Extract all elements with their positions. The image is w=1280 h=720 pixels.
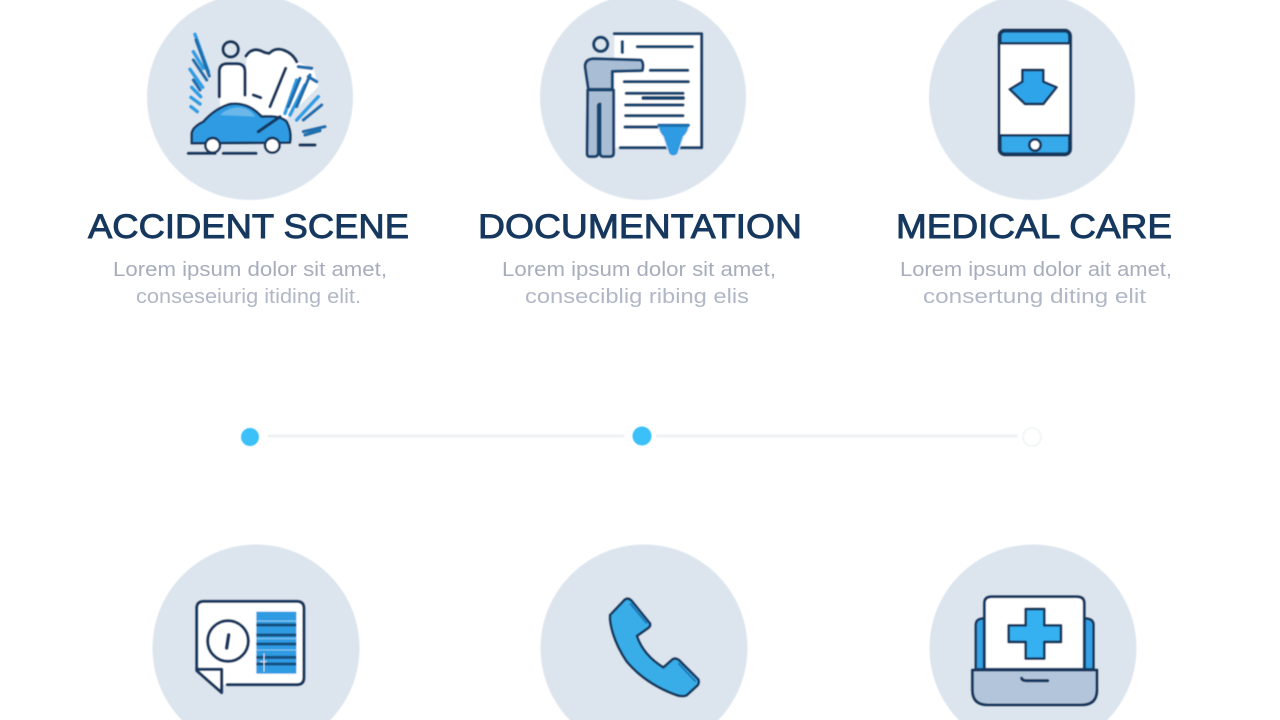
- panel: accident scene: [88, 0, 409, 308]
- heading: medical care: MEDICAL CARE: [896, 208, 1172, 246]
- text: accident scene description: Lorem ipsum dolor sit amet,: [113, 259, 387, 281]
- timeline connector: [241, 426, 1041, 446]
- icon: accident scene circle with car crash: [147, 0, 353, 200]
- text: accident scene description: conseseiurig itiding elit.: [136, 286, 361, 308]
- text: documentation description: conseciblig ribing elis: [525, 286, 749, 308]
- icon: report card circle: [152, 544, 360, 720]
- text: medical care description: [900, 259, 1172, 308]
- icon: telephone circle: [540, 544, 748, 720]
- icon: documentation circle with person and document: [540, 0, 746, 200]
- heading: accident scene: ACCIDENT SCENE: [88, 208, 409, 246]
- heading: documentation: DOCUMENTATION: [478, 208, 802, 246]
- text: documentation description: Lorem ipsum dolor sit amet,: [502, 259, 776, 281]
- icon: medical laptop circle: [930, 544, 1136, 720]
- text: documentation description: [502, 259, 776, 308]
- icon: medical care circle with smartphone: [929, 0, 1135, 200]
- text: medical care description: Lorem ipsum dolor ait amet,: [900, 259, 1172, 281]
- text: accident scene description: [113, 259, 387, 308]
- panel: documentation: [478, 0, 802, 308]
- panel: medical care: [896, 0, 1172, 308]
- text: medical care description: consertung diting elit: [923, 286, 1147, 308]
